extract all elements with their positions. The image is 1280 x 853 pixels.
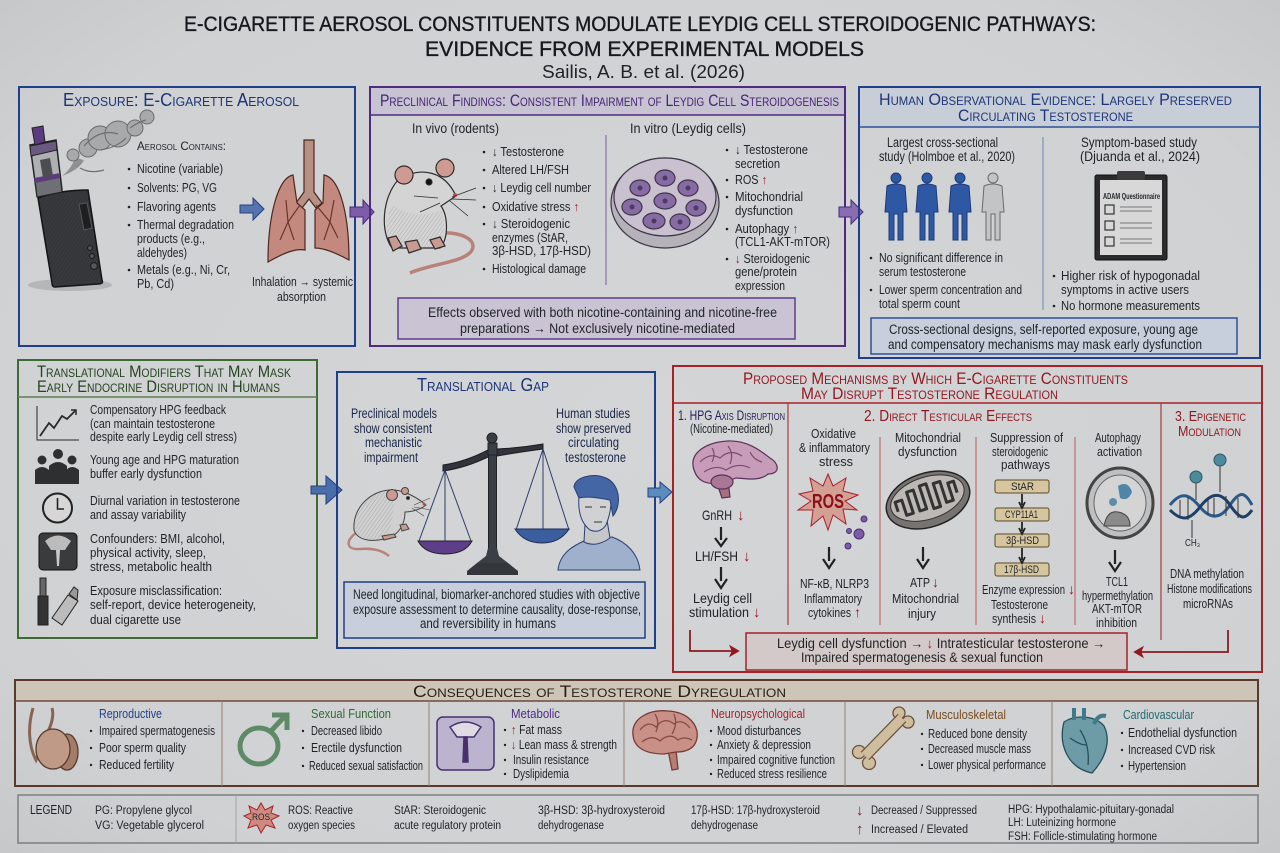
item: metabolic: Metabolic xyxy=(511,707,560,721)
text: human studies: circulating xyxy=(568,435,619,450)
caption: inhalation: Inhalation → systemic xyxy=(252,275,353,289)
legend: acute regulatory protein xyxy=(394,820,501,832)
heading: modifiers xyxy=(37,362,291,396)
title: Sailis, A. B. et al. (2026) xyxy=(542,62,745,82)
column: epigenetic modulation: Modulation xyxy=(1178,423,1241,440)
arrow: exposure to preclinical xyxy=(350,200,374,224)
flow: enzymes xyxy=(995,480,1049,576)
subheading: Holmboe study: Largest cross-sectional xyxy=(887,135,998,150)
heading: modifiers: Early Endocrine Disruption in Humans xyxy=(37,377,280,396)
column: epigenetic modulation: microRNAs xyxy=(1183,596,1233,611)
list: in vivo findings: ↓ Leydig cell number xyxy=(492,181,591,195)
icon: brain xyxy=(633,711,697,770)
item: sexual function xyxy=(240,707,423,773)
legend: FSH: Follicle-stimulating hormone xyxy=(1008,831,1157,843)
list: Djuanda findings: symptoms in active users xyxy=(1061,282,1189,297)
flow: enzymes: 3β-HSD xyxy=(1006,535,1039,547)
caption: inhalation: absorption xyxy=(277,290,326,304)
text: exposure misclassification: self-report, device heterogeneity, xyxy=(90,598,256,612)
callout: need longitudinal studies xyxy=(344,582,645,638)
column: HPG axis disruption: 1. HPG Axis Disruption xyxy=(678,407,785,423)
list: Djuanda findings: Higher risk of hypogonadal xyxy=(1061,268,1200,283)
icon: autophagosome xyxy=(1087,468,1153,538)
legend: decreased arrow: ↓ xyxy=(856,802,864,819)
item: neuropsychological: Impaired cognitive function xyxy=(717,753,835,767)
column: suppression of steroidogenic pathways: pathways xyxy=(1001,457,1050,472)
column: oxidative stress xyxy=(798,426,870,620)
text: exposure misclassification: Exposure misclassification: xyxy=(90,584,222,598)
callout: study limitations: and compensatory mechanisms may mask early dysfunction xyxy=(888,337,1202,352)
callout: need longitudinal studies: exposure assessment to determine causality, dose-response, xyxy=(353,602,641,617)
list: aerosol contains: Flavoring agents xyxy=(137,200,216,214)
text: preclinical models: mechanistic xyxy=(365,435,422,450)
heading: proposed mechanisms: Proposed Mechanisms by Which E-Cigarette Constituents xyxy=(743,369,1128,388)
text: preclinical models: impairment xyxy=(364,450,418,465)
callout: not exclusively nicotine-mediated xyxy=(398,298,795,339)
icon: ROS burst xyxy=(798,474,867,549)
column: suppression of steroidogenic pathways: ↓ xyxy=(1039,610,1046,626)
heading: human evidence xyxy=(879,90,1232,125)
legend: dehydrogenase xyxy=(691,820,758,832)
subheading: in vivo: In vivo (rodents) xyxy=(412,121,499,136)
column: epigenetic modulation: DNA methylation xyxy=(1170,566,1244,581)
panel: consequences xyxy=(15,680,1258,786)
icon: DNA with methyl groups: CH₃ xyxy=(1185,538,1200,549)
list: in vivo findings: Altered LH/FSH xyxy=(492,163,569,177)
list: in vitro findings: ↓ Steroidogenic xyxy=(735,252,810,266)
column: oxidative stress: & inflammatory xyxy=(799,440,870,455)
column: autophagy activation: AKT-mTOR xyxy=(1092,601,1142,616)
text: human studies: testosterone xyxy=(565,450,626,465)
icon: lungs xyxy=(268,140,349,262)
item: metabolic xyxy=(437,707,617,781)
icon: rat xyxy=(349,488,431,556)
list: in vivo findings xyxy=(483,145,591,276)
column: suppression of steroidogenic pathways: synthesis xyxy=(992,611,1036,626)
column: suppression of steroidogenic pathways: ↓ xyxy=(1068,581,1075,597)
column: autophagy activation: hypermethylation xyxy=(1082,588,1153,603)
text: human studies: Human studies xyxy=(556,406,630,421)
icon: vape and pod xyxy=(38,578,78,625)
column: mitochondrial dysfunction: ATP xyxy=(910,575,930,590)
icon: bone xyxy=(852,707,914,770)
callout: Leydig cell dysfunction result: Impaired spermatogenesis & sexual function xyxy=(801,650,1043,665)
list: Djuanda findings xyxy=(1053,268,1200,313)
icon: body scale xyxy=(39,533,77,570)
list: in vitro findings: expression xyxy=(735,279,785,293)
callout: study limitations xyxy=(871,318,1237,354)
callout: not exclusively nicotine-mediated: preparations → Not exclusively nicotine-mediated xyxy=(460,320,735,336)
list: in vitro findings: dysfunction xyxy=(735,204,793,218)
icon: testes xyxy=(30,708,78,770)
legend: increased arrow: ↑ xyxy=(856,821,864,838)
text: human studies: show preserved xyxy=(556,421,631,436)
text: preclinical models xyxy=(351,406,437,465)
icon: purple scale xyxy=(437,717,494,770)
column: mitochondrial dysfunction: injury xyxy=(908,606,936,621)
list: in vivo findings: ↓ Steroidogenic xyxy=(492,217,570,231)
callout: need longitudinal studies: and reversibility in humans xyxy=(420,616,556,631)
text: preclinical models: show consistent xyxy=(354,421,432,436)
callout: Leydig cell dysfunction result xyxy=(746,633,1127,670)
subheading: Djuanda study: Symptom-based study xyxy=(1081,135,1197,150)
heading: human evidence: Human Observational Evidence: Largely Preserved xyxy=(879,90,1232,109)
heading: modifiers: Translational Modifiers That May Mask xyxy=(37,362,291,381)
column: mitochondrial dysfunction: dysfunction xyxy=(898,444,957,459)
column: HPG axis disruption: ↓ xyxy=(737,507,744,524)
list: in vitro findings: (TCL1-AKT-mTOR) xyxy=(735,235,830,249)
text: diurnal variation xyxy=(90,494,240,522)
item: cardiovascular xyxy=(1062,708,1237,773)
item: musculoskeletal xyxy=(852,707,1046,772)
text: preclinical models: Preclinical models xyxy=(351,406,437,421)
column: oxidative stress: ↑ xyxy=(854,604,861,620)
column: mitochondrial dysfunction: ↓ xyxy=(932,574,939,590)
item: metabolic: Insulin resistance xyxy=(513,753,589,767)
list: in vivo findings: 3β-HSD, 17β-HSD) xyxy=(492,244,591,258)
icon: trend chart xyxy=(37,406,79,440)
column: oxidative stress: cytokines xyxy=(808,605,851,620)
column: autophagy activation xyxy=(1082,430,1153,630)
legend: PG: Propylene glycol xyxy=(95,805,192,817)
column: oxidative stress: Oxidative xyxy=(811,426,856,441)
heading: translational gap: Translational Gap xyxy=(417,375,549,395)
icon: clock xyxy=(43,494,72,522)
item: neuropsychological: Anxiety & depression xyxy=(717,738,811,752)
legend: VG: Vegetable glycerol xyxy=(95,820,204,832)
callout: need longitudinal studies: Need longitudinal, biomarker-anchored studies with objective xyxy=(353,587,640,602)
column: oxidative stress: NF-κB, NLRP3 xyxy=(800,576,869,591)
list: in vitro findings xyxy=(726,143,830,293)
title: E-CIGARETTE AEROSOL CONSTITUENTS MODULATE LEYDIG CELL STEROIDOGENIC PATHWAYS: xyxy=(184,13,1096,36)
list: aerosol contains: Pb, Cd) xyxy=(137,277,174,291)
arrow: gap to mechanisms xyxy=(648,482,672,503)
item: reproductive: Reduced fertility xyxy=(99,758,175,772)
list: aerosol contains xyxy=(128,139,234,291)
column: suppression of steroidogenic pathways: Enzyme expression xyxy=(982,582,1065,597)
title: EVIDENCE FROM EXPERIMENTAL MODELS xyxy=(425,38,864,61)
column: oxidative stress: stress xyxy=(819,454,853,469)
list: in vitro findings: Autophagy ↑ xyxy=(735,222,798,236)
icon: rat xyxy=(384,159,476,273)
item: musculoskeletal: Decreased muscle mass xyxy=(928,742,1031,756)
column: suppression of steroidogenic pathways: steroidogenic xyxy=(992,444,1048,459)
column: autophagy activation: Autophagy xyxy=(1095,430,1141,445)
text: compensatory feedback: Compensatory HPG feedback xyxy=(90,403,227,417)
text: young age: Young age and HPG maturation xyxy=(90,453,239,467)
text: confounders: physical activity, sleep, xyxy=(90,546,206,560)
subheading: in vitro: In vitro (Leydig cells) xyxy=(630,121,746,136)
list: Holmboe findings: total sperm count xyxy=(879,297,960,311)
column: autophagy activation: activation xyxy=(1097,444,1142,459)
list: aerosol contains: products (e.g., xyxy=(137,232,205,246)
legend: LH: Luteinizing hormone xyxy=(1008,817,1116,829)
icon: petri dish with cells xyxy=(611,158,719,248)
flow: enzymes: CYP11A1 xyxy=(1005,509,1038,521)
list: Holmboe findings xyxy=(870,251,1022,311)
list: Holmboe findings: No significant difference in xyxy=(879,251,1003,265)
column: HPG axis disruption: stimulation xyxy=(689,604,749,620)
list: in vitro findings: ↓ Testosterone xyxy=(735,143,808,157)
icon: vape device with smoke xyxy=(28,110,154,291)
column: mitochondrial dysfunction: Mitochondrial xyxy=(895,430,961,445)
text: young age: buffer early dysfunction xyxy=(90,467,202,481)
text: compensatory feedback: despite early Leydig cell stress) xyxy=(90,430,237,444)
legend: HPG: Hypothalamic-pituitary-gonadal xyxy=(1008,804,1174,816)
list: in vivo findings: Histological damage xyxy=(492,262,586,276)
icon: mitochondrion xyxy=(879,461,977,539)
item: sexual function: Sexual Function xyxy=(311,707,391,721)
icon: brain xyxy=(693,441,777,498)
column: HPG axis disruption: ↓ xyxy=(753,604,760,621)
legend: oxygen species xyxy=(288,820,355,832)
item: reproductive xyxy=(30,707,215,772)
item: neuropsychological: Reduced stress resilience xyxy=(717,767,827,781)
item: metabolic: Dyslipidemia xyxy=(513,767,569,781)
column: HPG axis disruption: Leydig cell xyxy=(693,590,752,606)
legend: StAR: Steroidogenic xyxy=(394,805,486,817)
item: cardiovascular: Endothelial dysfunction xyxy=(1128,726,1237,740)
heading: preclinical: Preclinical Findings: Consistent Impairment of Leydig Cell Steroidogenesis xyxy=(380,91,839,110)
item: musculoskeletal: Lower physical performance xyxy=(928,758,1046,772)
item: reproductive: Impaired spermatogenesis xyxy=(99,724,215,738)
item: sexual function: Erectile dysfunction xyxy=(311,741,402,755)
text: exposure misclassification: dual cigarette use xyxy=(90,613,181,627)
column: HPG axis disruption: LH/FSH xyxy=(695,548,738,564)
callout: Leydig cell dysfunction result: Leydig cell dysfunction → ↓ Intratesticular testosterone → xyxy=(777,636,1105,651)
panel: translational modifiers xyxy=(18,360,317,638)
column: suppression of steroidogenic pathways xyxy=(982,430,1075,626)
item: sexual function: Decreased libido xyxy=(311,724,382,738)
item: cardiovascular: Increased CVD risk xyxy=(1128,743,1216,757)
item: musculoskeletal: Reduced bone density xyxy=(928,727,1028,741)
icon: male symbol xyxy=(240,715,287,764)
panel: exposure xyxy=(19,87,355,346)
list: in vitro findings: ROS ↑ xyxy=(735,173,767,187)
text: exposure misclassification xyxy=(90,584,256,627)
panel: human observational evidence xyxy=(859,87,1260,358)
icon: ROS legend burst xyxy=(244,803,279,833)
column: suppression of steroidogenic pathways: Suppression of xyxy=(990,430,1063,445)
subheading: Holmboe study xyxy=(879,135,1015,164)
column: suppression of steroidogenic pathways: Testosterone xyxy=(991,597,1048,612)
arrow: preclinical to human xyxy=(839,200,863,224)
list: aerosol contains: aldehydes) xyxy=(137,246,187,260)
legend: 3β-HSD: 3β-hydroxysteroid xyxy=(538,805,665,817)
heading: human evidence: Circulating Testosterone xyxy=(958,106,1133,125)
text: compensatory feedback xyxy=(90,403,237,444)
legend xyxy=(18,795,1258,843)
text: confounders xyxy=(90,532,225,574)
column: HPG axis disruption: GnRH xyxy=(702,507,732,523)
list: aerosol contains: Solvents: PG, VG xyxy=(137,181,217,195)
legend: Increased / Elevated xyxy=(871,824,968,836)
column: epigenetic modulation: 3. Epigenetic xyxy=(1175,408,1246,425)
list: Djuanda findings: No hormone measurements xyxy=(1061,298,1200,313)
column: epigenetic modulation xyxy=(1167,408,1252,611)
column: HPG axis disruption xyxy=(678,407,785,621)
column heading: direct testicular effects: 2. Direct Testicular Effects xyxy=(864,408,1032,425)
subheading: Djuanda study: (Djuanda et al., 2024) xyxy=(1080,149,1200,164)
callout: not exclusively nicotine-mediated: Effects observed with both nicotine-containing and nicotine-free xyxy=(428,304,777,320)
item: metabolic: ↓ Lean mass & strength xyxy=(511,738,617,752)
legend: dehydrogenase xyxy=(538,820,604,832)
column: autophagy activation: TCL1 xyxy=(1106,574,1128,589)
list: in vitro findings: Mitochondrial xyxy=(735,190,803,204)
item: neuropsychological xyxy=(633,707,835,781)
panel: proposed mechanisms xyxy=(673,366,1262,672)
arrow: exposure to lungs xyxy=(240,198,264,220)
item: neuropsychological: Neuropsychological xyxy=(711,707,805,721)
list: Holmboe findings: serum testosterone xyxy=(879,265,966,279)
text: young age xyxy=(90,453,239,481)
arrow: HPG axis to result xyxy=(690,630,738,651)
item: reproductive: Reproductive xyxy=(99,707,162,721)
column: HPG axis disruption: ↓ xyxy=(743,548,750,565)
list: in vivo findings: ↓ Testosterone xyxy=(492,145,564,159)
icon: balance scale xyxy=(418,433,569,575)
icon: ROS burst: ROS xyxy=(812,491,844,513)
icon: heart xyxy=(1062,708,1107,773)
icon: people xyxy=(35,449,79,484)
legend: LEGEND xyxy=(30,802,72,817)
item: metabolic: ↑ Fat mass xyxy=(511,723,562,737)
list: in vivo findings: enzymes (StAR, xyxy=(492,231,568,245)
text: diurnal variation: Diurnal variation in testosterone xyxy=(90,494,240,508)
list: aerosol contains: Aerosol Contains: xyxy=(137,139,226,153)
item: musculoskeletal: Musculoskeletal xyxy=(926,708,1006,722)
flow: enzymes: StAR xyxy=(1011,481,1034,493)
title xyxy=(184,13,1096,82)
text: compensatory feedback: (can maintain testosterone xyxy=(90,417,215,431)
icon: ADAM questionnaire clipboard: ADAM Questionnaire xyxy=(1103,191,1160,201)
column: HPG axis disruption: (Nicotine-mediated) xyxy=(690,422,773,436)
list: Holmboe findings: Lower sperm concentration and xyxy=(879,283,1022,297)
subheading: Djuanda study xyxy=(1080,135,1200,164)
icon: DNA with methyl groups xyxy=(1170,454,1252,549)
legend: 17β-HSD: 17β-hydroxysteroid xyxy=(691,805,820,817)
heading: consequences: Consequences of Testosterone Dyregulation xyxy=(413,682,786,701)
item: reproductive: Poor sperm quality xyxy=(99,741,187,755)
icon: ROS legend burst: ROS xyxy=(252,812,270,823)
panel: translational gap xyxy=(337,372,655,648)
callout: study limitations: Cross-sectional designs, self-reported exposure, young age xyxy=(889,322,1198,337)
subheading: Holmboe study: study (Holmboe et al., 2020) xyxy=(879,149,1015,164)
arrow: epigenetic to result xyxy=(1135,630,1228,652)
heading: exposure: Exposure: E-Cigarette Aerosol xyxy=(63,90,299,110)
icon: young man xyxy=(558,476,640,570)
text: human studies xyxy=(556,406,631,465)
column: autophagy activation: inhibition xyxy=(1096,615,1137,630)
text: confounders: Confounders: BMI, alcohol, xyxy=(90,532,225,546)
arrow: modifiers to gap xyxy=(311,476,342,504)
item: neuropsychological: Mood disturbances xyxy=(717,724,801,738)
list: aerosol contains: Thermal degradation xyxy=(137,218,234,232)
caption: inhalation xyxy=(252,275,353,304)
heading: proposed mechanisms xyxy=(743,369,1128,403)
icon: ADAM questionnaire clipboard xyxy=(1095,171,1167,260)
flow: enzymes: 17β-HSD xyxy=(1004,564,1039,576)
legend: ROS: Reactive xyxy=(288,805,353,817)
list: in vitro findings: gene/protein xyxy=(735,265,797,279)
text: confounders: stress, metabolic health xyxy=(90,560,212,574)
panel: preclinical findings xyxy=(370,87,845,346)
column: mitochondrial dysfunction: Mitochondrial xyxy=(892,591,959,606)
heading: proposed mechanisms: May Disrupt Testosterone Regulation xyxy=(801,384,1058,403)
icon: four human figures xyxy=(885,173,1004,240)
legend: Decreased / Suppressed xyxy=(871,805,977,817)
column: mitochondrial dysfunction xyxy=(879,430,977,621)
item: sexual function: Reduced sexual satisfaction xyxy=(309,759,423,773)
list: aerosol contains: Metals (e.g., Ni, Cr, xyxy=(137,263,230,277)
list: aerosol contains: Nicotine (variable) xyxy=(137,162,223,176)
text: diurnal variation: and assay variability xyxy=(90,508,187,522)
list: in vitro findings: secretion xyxy=(735,157,780,171)
item: cardiovascular: Cardiovascular xyxy=(1123,708,1194,722)
list: in vivo findings: Oxidative stress ↑ xyxy=(492,200,579,214)
column: oxidative stress: Inflammatory xyxy=(804,591,862,606)
item: cardiovascular: Hypertension xyxy=(1128,759,1186,773)
